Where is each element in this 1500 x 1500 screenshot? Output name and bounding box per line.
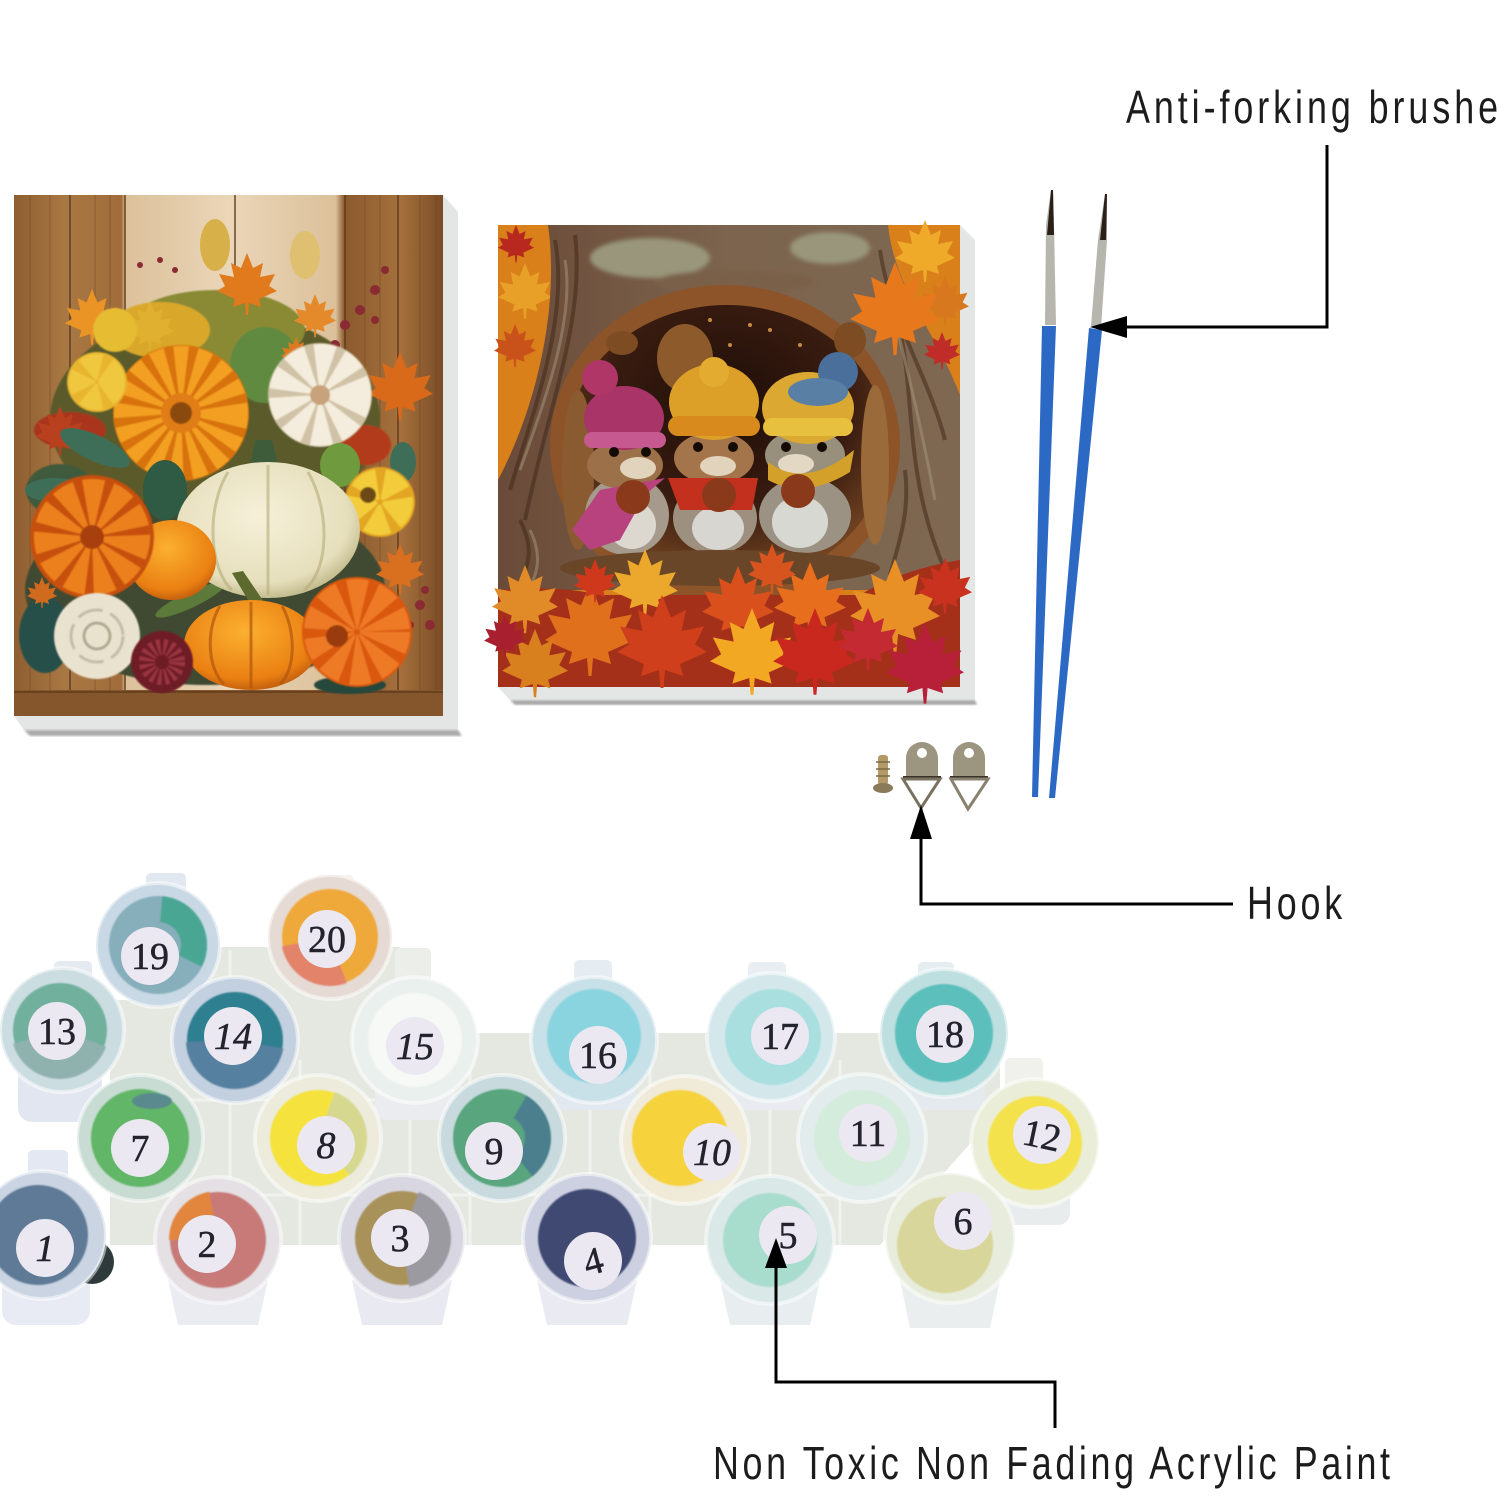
pot 4	[523, 1174, 651, 1325]
pot 9: 9	[484, 1131, 504, 1173]
pot 11: 11	[850, 1113, 886, 1155]
pot 9	[439, 1075, 565, 1201]
white pumpkin	[176, 440, 360, 598]
pot 19: 19	[131, 936, 169, 978]
pot 17: 17	[761, 1016, 799, 1058]
panel: squirrels in tree canvas	[484, 220, 977, 705]
orange flower left	[30, 475, 154, 599]
pot 12	[971, 1058, 1099, 1225]
pot 1: 1	[36, 1228, 54, 1270]
orange sunflower	[113, 345, 249, 481]
blue and yellow hat squirrel	[759, 352, 858, 553]
pot 2	[155, 1177, 281, 1325]
foliage	[19, 290, 391, 694]
pot 20	[268, 875, 392, 999]
tail and yellow hat squirrel	[657, 324, 760, 554]
white rose	[54, 593, 140, 679]
panel: autumn pumpkin and flowers canvas	[14, 195, 462, 736]
label: brushes: Anti-forking brushe	[1126, 82, 1498, 133]
pot 3: 3	[390, 1218, 410, 1260]
tree trunk	[498, 225, 960, 590]
icon: brush right	[1049, 194, 1107, 798]
label: paint: Non Toxic Non Fading Acrylic Paint	[713, 1438, 1391, 1489]
pot 7	[77, 1075, 203, 1201]
orange gourd	[128, 520, 216, 600]
tulips and leaves at top	[27, 219, 433, 608]
icon: brush left	[1032, 190, 1056, 797]
orange peony right	[302, 577, 412, 687]
cream flower	[268, 343, 372, 447]
arrow: paint	[765, 1238, 1055, 1428]
moss patches	[590, 232, 870, 294]
yellow flower top left	[67, 308, 137, 412]
pot 18: 18	[926, 1014, 964, 1056]
pot 15	[352, 948, 478, 1120]
pink hat squirrel	[572, 360, 669, 555]
arrow: hook	[910, 805, 1233, 904]
pot 14: 14	[214, 1016, 252, 1058]
pot 17	[707, 962, 835, 1110]
icon: hook one	[903, 742, 941, 808]
plastic tray	[110, 947, 1000, 1245]
fallen maple leaves	[484, 262, 972, 704]
pot 3	[339, 1175, 465, 1325]
pot 10	[621, 1076, 749, 1204]
pot 13	[0, 961, 124, 1122]
burgundy flower	[131, 631, 193, 693]
pot 14	[172, 977, 298, 1103]
pot 19	[96, 873, 220, 1007]
pot 13: 13	[38, 1011, 76, 1053]
pot 6: 6	[954, 1201, 972, 1243]
pot 5: 5	[778, 1215, 798, 1257]
pot 7: 7	[130, 1128, 150, 1170]
label: hook: Hook	[1247, 878, 1342, 929]
green leaves	[25, 420, 416, 623]
yellow flower right	[345, 467, 415, 537]
icon: hook two	[950, 742, 988, 809]
pot 1	[0, 1150, 114, 1325]
pot 16: 16	[579, 1035, 617, 1077]
pine cones	[606, 322, 866, 358]
pot 12: 12	[1019, 1111, 1065, 1160]
berries and stems	[137, 257, 435, 630]
pot 18	[880, 962, 1008, 1110]
background leaves behind tree	[494, 220, 969, 367]
paint pot set	[0, 873, 1099, 1328]
pot 5	[706, 1176, 834, 1325]
arrow: brushes	[1090, 145, 1327, 338]
pot 11	[798, 1074, 926, 1202]
specks	[678, 318, 802, 347]
pot 20: 20	[308, 919, 346, 961]
pot 10: 10	[693, 1132, 731, 1174]
branch ledge	[560, 550, 880, 586]
tree hollow	[550, 285, 900, 605]
pot 6	[885, 1173, 1015, 1328]
pot 16	[531, 960, 657, 1110]
pot 4: 4	[579, 1239, 608, 1285]
pot 2: 2	[198, 1224, 216, 1266]
pot 15: 15	[396, 1026, 434, 1068]
pot 8: 8	[316, 1125, 336, 1167]
orange pumpkin	[184, 571, 318, 690]
pot 8	[255, 1075, 381, 1201]
icon: screw	[873, 755, 893, 793]
